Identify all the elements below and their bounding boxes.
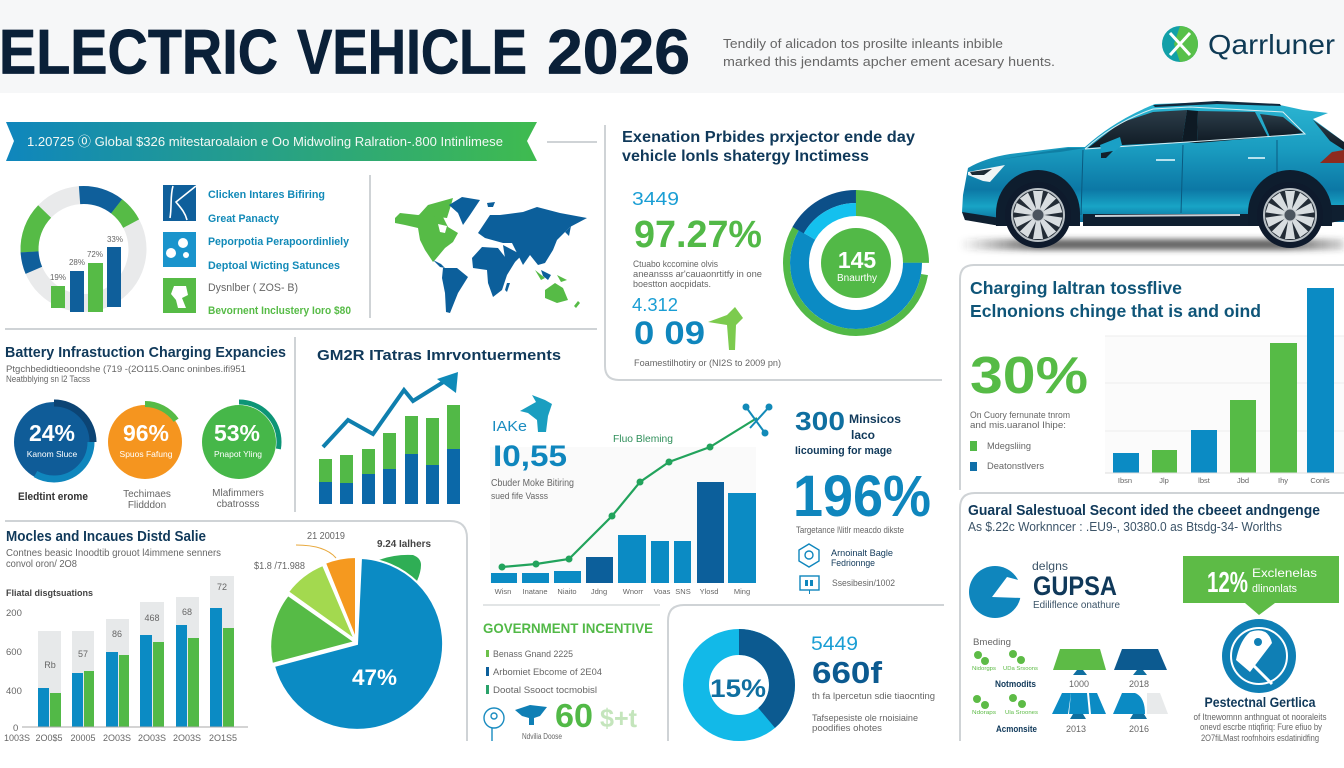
front wheel — [1005, 182, 1071, 248]
combo chart — [490, 404, 772, 596]
panel: improvement chart — [317, 347, 561, 504]
combo chart: Wisn — [495, 587, 511, 596]
gauge 24% — [14, 402, 94, 482]
description — [6, 364, 246, 384]
panel: sales segment — [960, 493, 1344, 744]
heading: Charging laltran tossflive — [970, 278, 1182, 298]
title: VEHICLE — [297, 18, 527, 88]
trapezoid charts — [1052, 649, 1168, 734]
banner: 1.20725 ⓪ Global $326 mitestaroalaion e Oo Midwoling Ralration-.800 Intinlimese — [27, 134, 503, 149]
stat 660f: poodifies ohotes — [812, 723, 882, 734]
grouped bar chart: 0 — [13, 723, 18, 734]
tail light — [1320, 150, 1344, 163]
description: As $.22c Worknncer : .EU9-, 30380.0 as Btsdg-34- Worlths — [968, 520, 1282, 534]
panel: government incentive — [483, 620, 653, 741]
grouped bar chart: Fliatal disgtsuations — [6, 588, 93, 599]
legend: Mdegsliing — [987, 441, 1031, 452]
combo chart: Ylosd — [700, 587, 718, 596]
logo: Qarrluner — [1208, 29, 1335, 60]
header subtitle — [723, 36, 1055, 69]
gauge 53%: 53% — [214, 420, 260, 446]
arrow: growth trend — [323, 372, 458, 447]
gauge 96%: 96% — [123, 420, 169, 446]
grouped bar chart — [4, 576, 248, 743]
feature: subscription: Ssesibesin/1002 — [832, 578, 895, 589]
callout: 12% — [1207, 567, 1248, 599]
grouped bar chart: 20005 — [70, 733, 96, 743]
matrix row labels: Acmonsite — [996, 724, 1037, 735]
panel: global overview — [5, 122, 597, 329]
grouped bar chart: 468 — [144, 613, 160, 623]
stat 60 — [522, 697, 637, 741]
stat 10,55 — [491, 418, 574, 502]
grouped bar chart: 57 — [78, 649, 88, 659]
green icons — [972, 650, 1038, 716]
panel: 15% donut — [668, 605, 944, 741]
heading: Eclnonions chinge that is and oind — [970, 301, 1261, 321]
grouped bar chart: 1003S — [4, 733, 30, 743]
bar chart — [1105, 288, 1344, 485]
green icons: Ndoraps — [972, 710, 996, 716]
list of indicators: Deptoal Wicting Satunces — [208, 260, 340, 272]
wheel arches — [996, 170, 1332, 226]
grouped bar chart: 68 — [182, 607, 192, 617]
legend: Deatonstlvers — [987, 461, 1044, 472]
trapezoid charts: 2018 — [1129, 679, 1149, 689]
bar chart: Jlp — [1159, 476, 1169, 485]
list of indicators: Dysnlber ( ZOS- B) — [208, 282, 298, 294]
icon: hexagon — [799, 544, 819, 567]
pie chart: 21 20019 — [307, 531, 345, 542]
stat 660f — [811, 634, 935, 734]
description: On Cuory fernunate tnrom — [970, 410, 1070, 421]
stat 300: Iicouming for mage — [795, 445, 892, 457]
grouped bar chart: 2O03S — [103, 733, 131, 743]
stat 300: 300 — [795, 406, 845, 436]
stat 30%: 30% — [970, 347, 1088, 405]
stat 97.27%: 3449 — [632, 189, 679, 209]
stacked bars — [319, 405, 460, 504]
gauge captions: cbatrosss — [217, 499, 259, 510]
panel: rising chart — [490, 395, 772, 596]
icon: road — [163, 185, 196, 221]
stat 660f: 660f — [812, 655, 883, 690]
legend — [970, 441, 1044, 472]
list of indicators: Great Panacty — [208, 213, 280, 225]
hood crease — [975, 148, 1085, 165]
list of indicators — [208, 189, 351, 317]
donut with bars: 72% — [87, 250, 103, 259]
title: 2026 — [547, 18, 690, 88]
bullet list — [486, 649, 602, 696]
title: ELECTRIC — [0, 18, 278, 88]
stat GUPSA — [1032, 559, 1120, 611]
chart title: Fluo Bleming — [613, 433, 673, 445]
combo chart: Voas — [654, 587, 671, 596]
stat 97.27%: boestton aocpidats. — [633, 279, 711, 290]
heading: GM2R ITatras Imrvontuerments — [317, 347, 561, 364]
icon: shield badge — [1222, 619, 1296, 693]
pie chart: 9.24 Ialhers — [377, 538, 431, 550]
description: and mis.uaranol Ihipe: — [970, 420, 1066, 431]
car body — [962, 102, 1344, 222]
stat 0 09: 4.312 — [632, 295, 678, 315]
header — [0, 0, 1344, 93]
mirror — [1100, 137, 1122, 158]
description: Ptgchbedidtieoondshe (719 -(2O115.Oanc oninbes.ifi951 — [6, 364, 246, 374]
door lines and handles — [1081, 140, 1277, 215]
gauge 24%: Kanom Sluce — [27, 449, 78, 459]
sill — [1083, 214, 1250, 226]
stat 300: laco — [851, 428, 875, 442]
badge caption — [1194, 694, 1327, 744]
gauge 96%: Spuos Fafung — [120, 449, 173, 459]
callout — [1183, 556, 1339, 615]
list of indicators: Bevornent Inclustery Ioro $80 — [208, 305, 351, 317]
grouped bar chart: 2O1S5 — [209, 733, 237, 743]
donut chart: 15% — [710, 675, 766, 703]
window chrome — [1085, 107, 1305, 149]
icon: recycling — [163, 232, 196, 267]
feature: badge: Arnoinalt Bagle — [831, 548, 893, 559]
stat 10,55: Cbuder Moke Bitiring — [491, 478, 574, 489]
stat 10,55: I0,55 — [493, 440, 567, 473]
stat 60: $+t — [600, 703, 637, 733]
gauge 53%: Pnapot Yling — [214, 449, 262, 459]
combo chart: Jdng — [591, 587, 607, 596]
icon: monitor — [800, 576, 819, 594]
trapezoid charts: 1000 — [1069, 679, 1089, 689]
car illustration — [960, 101, 1344, 250]
pie chart — [254, 531, 443, 730]
green icons: Nidorgps — [972, 666, 996, 672]
matrix row labels: Bmeding — [973, 637, 1011, 648]
stat 60: 60 — [555, 697, 593, 734]
icon: green tree — [708, 307, 743, 350]
logo — [1162, 26, 1335, 62]
panel: battery infrastructure — [5, 337, 295, 512]
heading — [622, 129, 915, 165]
gauge 24%: 24% — [29, 420, 75, 446]
windows — [1088, 110, 1344, 150]
grouped bar chart: 72 — [217, 582, 227, 592]
stat 660f: 5449 — [811, 634, 858, 655]
stat 0 09 — [632, 295, 781, 369]
green icons: UDa Srsoons — [1003, 666, 1038, 672]
front bumper — [962, 212, 1000, 226]
icon: magnifier — [484, 708, 504, 741]
matrix row labels: Notmodits — [995, 679, 1036, 690]
stat 60: Ndvilia Doose — [522, 732, 562, 741]
callout: Exclenelas — [1252, 566, 1317, 580]
feature: badge — [831, 548, 893, 569]
badge caption: Pestectnal Gertlica — [1204, 694, 1316, 710]
donut chart — [696, 642, 782, 728]
grouped bar chart: 400 — [6, 686, 22, 697]
green icons: Ula Sroones — [1005, 710, 1038, 716]
bar chart: Ihy — [1278, 476, 1288, 485]
description — [970, 410, 1070, 431]
stat 0 09: Foamestilhotiry or (NI2S to 2009 pn) — [634, 358, 781, 369]
stat 660f: th fa lpercetun sdie tiaocnting — [812, 691, 935, 702]
stat GUPSA: GUPSA — [1033, 571, 1117, 601]
icon: pie disc — [969, 566, 1022, 618]
description: convol oron/ 2O8 — [6, 559, 77, 570]
heading: Exenation Prbides prxjector ende day — [622, 129, 915, 146]
bullet list: Arbomiet Ebcome of 2E04 — [493, 667, 602, 678]
roof rail — [1153, 101, 1281, 107]
grouped bar chart: 2O0$5 — [35, 733, 63, 743]
layered donut — [765, 172, 947, 354]
gauge captions: Techimaes — [123, 489, 171, 500]
stat 97.27%: 97.27% — [634, 214, 762, 256]
trapezoid charts: 2016 — [1129, 724, 1149, 734]
bar chart: Conls — [1310, 476, 1330, 485]
pie chart: 47% — [352, 665, 397, 690]
stat 196%: 196% — [793, 464, 931, 529]
stat 97.27% — [632, 189, 762, 290]
grouped bar chart: 200 — [6, 608, 22, 619]
description: Neatbblying sn l2 Tacss — [6, 374, 90, 384]
icon: teal emblem — [520, 395, 552, 432]
stat GUPSA: Ediliflence onathure — [1033, 600, 1120, 611]
callout: dlinonlats — [1252, 583, 1297, 595]
heading: Battery Infrastuction Charging Expancies — [5, 344, 286, 361]
stat 196%: Targetance l\litlr meacdo dikste — [796, 525, 904, 535]
list of indicators: Clicken Intares Bifiring — [208, 189, 325, 201]
description — [6, 548, 221, 570]
donut with bars: 19% — [50, 273, 66, 282]
header subtitle: Tendily of alicadon tos prosilte inleants inbible — [723, 36, 1003, 51]
stat 660f: Tafsepesiste ole rnoisiaine — [812, 713, 918, 724]
headlight — [968, 165, 1005, 182]
panel: models and sales — [4, 521, 467, 743]
panel: stats column — [793, 406, 931, 594]
trapezoid charts: 2013 — [1066, 724, 1086, 734]
bar chart: lbst — [1198, 476, 1211, 485]
donut with bars: 33% — [107, 235, 123, 244]
stat 0 09: 0 09 — [634, 315, 705, 351]
heading: Guaral Salestuoal Secont ided the cbeeet andngenge — [968, 502, 1320, 519]
combo chart: Wnorr — [623, 587, 644, 596]
icon: wind turbine — [515, 705, 547, 725]
panel: charging transition — [960, 265, 1344, 490]
layered donut: Bnaurthy — [837, 273, 877, 284]
banner — [6, 122, 537, 161]
world map — [395, 197, 587, 313]
donut with bars — [8, 173, 159, 325]
gauge 53% — [199, 402, 279, 482]
stat 300: Minsicos — [849, 412, 901, 426]
rear wheel — [1257, 182, 1323, 248]
layered donut: 145 — [838, 247, 876, 273]
matrix row labels — [973, 637, 1037, 735]
bullet list: Benass Gnand 2225 — [493, 649, 573, 660]
stat 97.27%: aneansss ar'cauaonrtitfy in one — [633, 269, 762, 280]
bar chart: Jbd — [1237, 476, 1249, 485]
gauge captions — [18, 488, 264, 511]
rear bumper — [1325, 205, 1344, 224]
bullet list: Dootal Ssooct tocmobisl — [493, 685, 597, 696]
combo chart: SNS — [675, 587, 691, 596]
heading: Mocles and Incaues Distd Salie — [6, 528, 206, 545]
grouped bar chart: Rb — [44, 660, 56, 670]
heading: vehicle lonls shatergy Inctimess — [622, 148, 869, 165]
grouped bar chart: 2O03S — [173, 733, 201, 743]
panel: projection — [605, 125, 947, 380]
bar chart: Ibsn — [1118, 476, 1132, 485]
grouped bar chart: 600 — [6, 647, 22, 658]
gauge captions: Mlafimmers — [212, 488, 264, 499]
gauge captions: Eledtint erome — [18, 491, 88, 503]
heading — [970, 278, 1261, 321]
header subtitle: marked this jendamts apcher ement acesary huents. — [723, 54, 1055, 69]
stat 97.27%: Ctuabo kccomine olvis — [633, 259, 718, 270]
stat 10,55: IAKe — [492, 418, 527, 435]
gauge captions: Flidddon — [128, 500, 166, 511]
heading: GOVERNMENT INCENTIVE — [483, 620, 653, 636]
title — [0, 18, 690, 88]
stat 10,55: sued fife Vasss — [491, 491, 548, 502]
feature: badge: Fedrionnge — [831, 558, 875, 569]
icon: plant — [163, 278, 196, 313]
grouped bar chart: 86 — [112, 629, 122, 639]
list of indicators: Peporpotia Perapoordinliely — [208, 236, 350, 248]
combo chart: Niaito — [557, 587, 577, 596]
stat GUPSA: delgns — [1032, 559, 1068, 573]
combo chart: Ming — [734, 587, 750, 596]
description: Contnes beasic Inoodtib grouot l4immene senners — [6, 548, 221, 559]
stat 300 — [795, 406, 901, 457]
gauge 96% — [107, 404, 183, 480]
combo chart: Inatane — [522, 587, 548, 596]
donut with bars: 28% — [69, 258, 85, 267]
grouped bar chart: 2O03S — [138, 733, 166, 743]
pie chart: $1.8 /71.988 — [254, 561, 305, 572]
